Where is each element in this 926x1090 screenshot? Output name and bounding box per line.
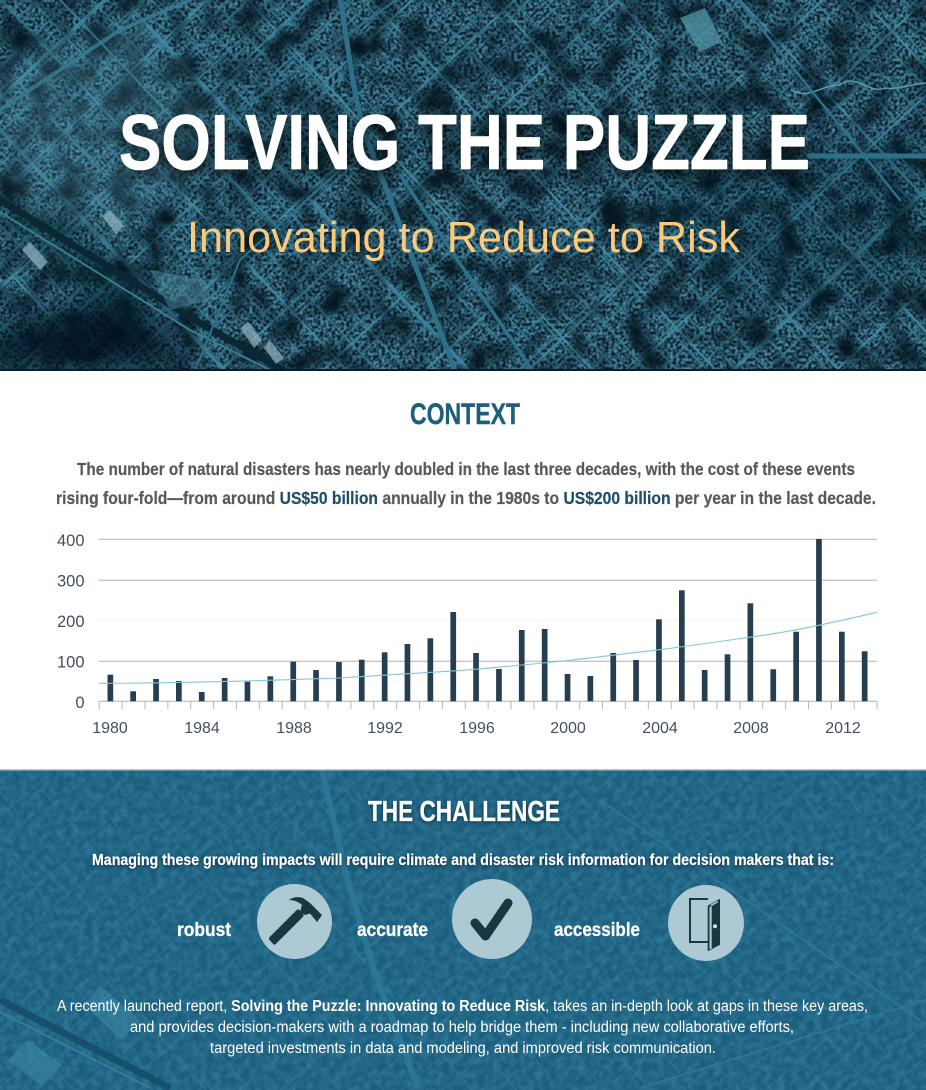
heading: context: CONTEXT <box>410 398 520 431</box>
panel: context <box>0 371 926 769</box>
x axis labels: 2012 <box>825 720 861 737</box>
hero: satellite city background <box>0 0 926 371</box>
label: robust: robust <box>177 920 232 941</box>
bars <box>108 539 868 701</box>
x axis labels: 1984 <box>184 720 220 737</box>
icon: hammer <box>257 884 332 959</box>
panel: the challenge <box>0 769 926 1090</box>
challenge lead sentence: Managing these growing impacts will require climate and disaster risk information for decision makers that is: <box>92 852 834 869</box>
subtitle: Innovating to Reduce to Risk <box>187 213 741 262</box>
x axis labels: 1996 <box>459 720 495 737</box>
heading: the challenge: THE CHALLENGE <box>368 796 560 828</box>
x axis labels: 2008 <box>733 720 769 737</box>
y axis labels: 200 <box>57 613 84 631</box>
report description paragraph: A recently launched report, Solving the Puzzle: Innovating to Reduce Risk, takes an in-depth look at gaps in these key areas, <box>57 998 868 1015</box>
context paragraph: rising four-fold—from around US$50 billion annually in the 1980s to US$200 billion per year in the last decade. <box>56 488 876 508</box>
report description paragraph <box>57 998 868 1057</box>
context paragraph <box>56 459 876 508</box>
x axis labels <box>92 720 861 737</box>
x axis labels: 2004 <box>642 720 678 737</box>
x axis labels: 1980 <box>92 720 128 737</box>
report description paragraph: and provides decision-makers with a roadmap to help bridge them - including new collaborative efforts, <box>130 1019 794 1036</box>
bar chart: annual disaster cost 1980-2013 <box>57 532 878 737</box>
label: accessible: accessible <box>554 920 640 941</box>
y axis labels <box>57 532 84 712</box>
icon: open door <box>668 885 744 961</box>
icon: check mark <box>452 879 532 959</box>
x axis labels: 1988 <box>276 720 312 737</box>
x axis labels: 2000 <box>550 720 586 737</box>
y axis labels: 0 <box>75 694 84 712</box>
label: accurate: accurate <box>357 920 428 941</box>
y axis labels: 100 <box>57 654 84 672</box>
y axis labels: 400 <box>57 532 84 550</box>
report description paragraph: targeted investments in data and modeling, and improved risk communication. <box>210 1040 716 1057</box>
y axis labels: 300 <box>57 572 84 590</box>
trend line <box>99 612 877 683</box>
x axis labels: 1992 <box>367 720 403 737</box>
